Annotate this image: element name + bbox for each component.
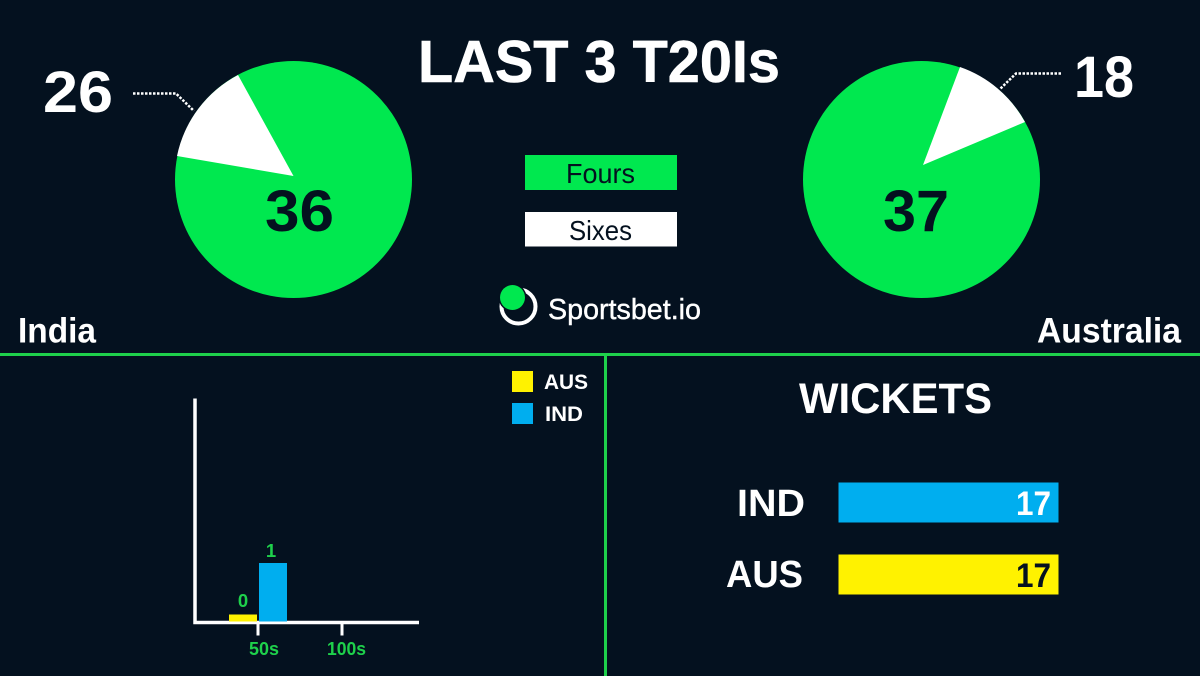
bar: AUS 50s: [229, 614, 257, 622]
value: Australia fours: 37: [883, 179, 949, 244]
value: AUS 50s: 0: [238, 590, 248, 611]
value: IND 50s: 1: [266, 540, 276, 561]
wedge: Australia sixes: [923, 67, 1025, 165]
callout: Australia sixes: 18: [1074, 45, 1134, 110]
callout: India sixes: [43, 60, 194, 125]
dividers: [0, 353, 1200, 676]
wickets row: IND: [737, 482, 1058, 525]
logo: Sportsbet.io: [498, 284, 701, 326]
bar chart: 50s and 100s: [195, 398, 419, 659]
axis label: 100s: 100s: [327, 639, 366, 659]
panel: Australia pie chart: [803, 61, 1040, 298]
wickets row: AUS: 17: [1016, 557, 1051, 595]
value: India fours: 36: [265, 179, 334, 244]
logo: Sportsbet.io: Sportsbet.io: [548, 294, 701, 326]
bar: IND 50s: [259, 563, 287, 622]
legend: Fours: [525, 155, 677, 190]
team label: India: India: [18, 312, 96, 350]
legend: centuries chart: AUS: [544, 371, 588, 394]
legend: centuries chart: [512, 371, 588, 426]
legend: Fours: Fours: [566, 158, 635, 189]
legend: centuries chart: IND: [545, 403, 583, 426]
panel: India pie chart: [175, 61, 412, 298]
wedge: India sixes: [177, 75, 294, 176]
callout: India sixes: 26: [43, 60, 113, 125]
heading: wickets: WICKETS: [799, 375, 992, 423]
legend: Sixes: Sixes: [569, 215, 632, 246]
legend: Sixes: [525, 212, 677, 246]
wickets row: AUS: [726, 554, 1058, 596]
wickets row: AUS: AUS: [726, 554, 803, 596]
team label: Australia: Australia: [1037, 312, 1182, 350]
title: LAST 3 T20Is: [418, 29, 780, 95]
callout: Australia sixes: [1000, 45, 1134, 110]
wickets row: IND: IND: [737, 483, 805, 525]
axis label: 50s: 50s: [249, 639, 279, 659]
wickets row: IND: 17: [1016, 485, 1051, 523]
